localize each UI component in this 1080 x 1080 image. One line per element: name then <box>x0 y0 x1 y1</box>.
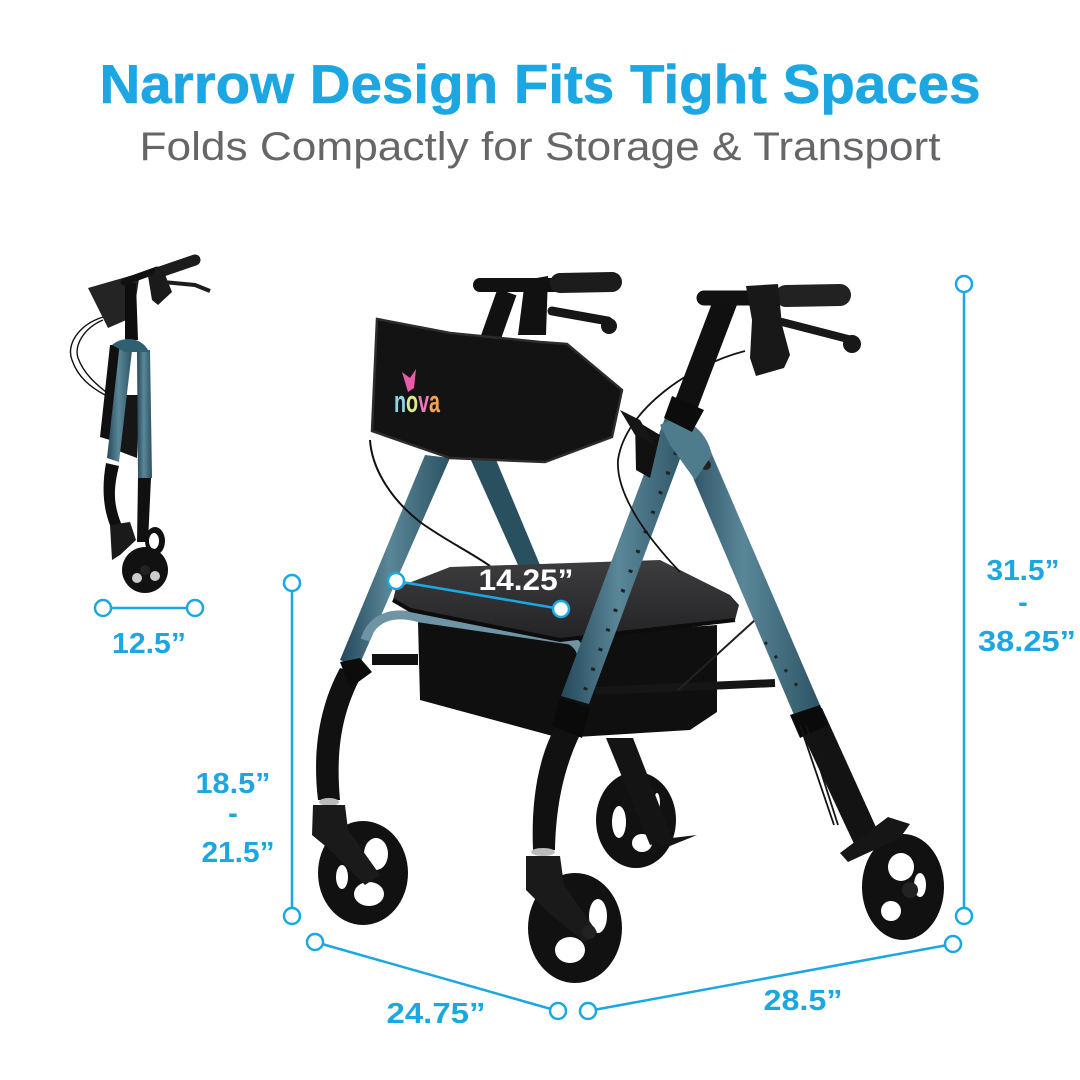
near handle <box>664 284 861 432</box>
basket <box>418 622 717 738</box>
dimension: depth <box>307 934 566 1030</box>
nova logo: nova <box>394 384 440 419</box>
folded walker photo <box>70 260 210 593</box>
dimension: width <box>580 936 961 1019</box>
seat frame <box>365 615 582 668</box>
dimension: seat width: 14.25” <box>478 564 574 597</box>
far legs <box>316 455 540 806</box>
far handle <box>480 276 617 340</box>
dimension: seat height: 18.5” <box>196 768 270 800</box>
dimension: depth: 24.75” <box>386 998 486 1030</box>
near cable <box>618 351 838 825</box>
dimension: overall height <box>956 276 1076 924</box>
cable far <box>370 440 490 566</box>
dimension: folded width: 12.5” <box>112 628 186 660</box>
front centre wheel and fork <box>526 856 622 983</box>
far left wheel and fork <box>312 805 408 925</box>
dimension: seat height <box>196 575 300 924</box>
dimension: overall height: 38.25” <box>978 626 1076 658</box>
rear centre wheel <box>596 738 697 868</box>
dimension: seat height: - <box>228 798 238 830</box>
dimension: seat height: 21.5” <box>202 837 274 869</box>
near front leg <box>531 418 690 856</box>
backrest <box>372 319 622 462</box>
dimension: width: 28.5” <box>764 985 842 1017</box>
rear cross brace <box>595 683 775 691</box>
title: Narrow Design Fits Tight Spaces <box>100 53 980 115</box>
dimension: overall height: - <box>1018 587 1028 619</box>
dimension: folded width <box>95 600 203 660</box>
nova logo <box>394 369 440 419</box>
dimension: overall height: 31.5” <box>986 555 1060 587</box>
subtitle: Folds Compactly for Storage & Transport <box>140 125 940 169</box>
main rollator photo <box>312 276 944 983</box>
near rear leg <box>620 410 880 848</box>
seat <box>393 560 739 640</box>
rear right wheel <box>840 817 944 940</box>
dimension: seat width <box>388 564 574 617</box>
